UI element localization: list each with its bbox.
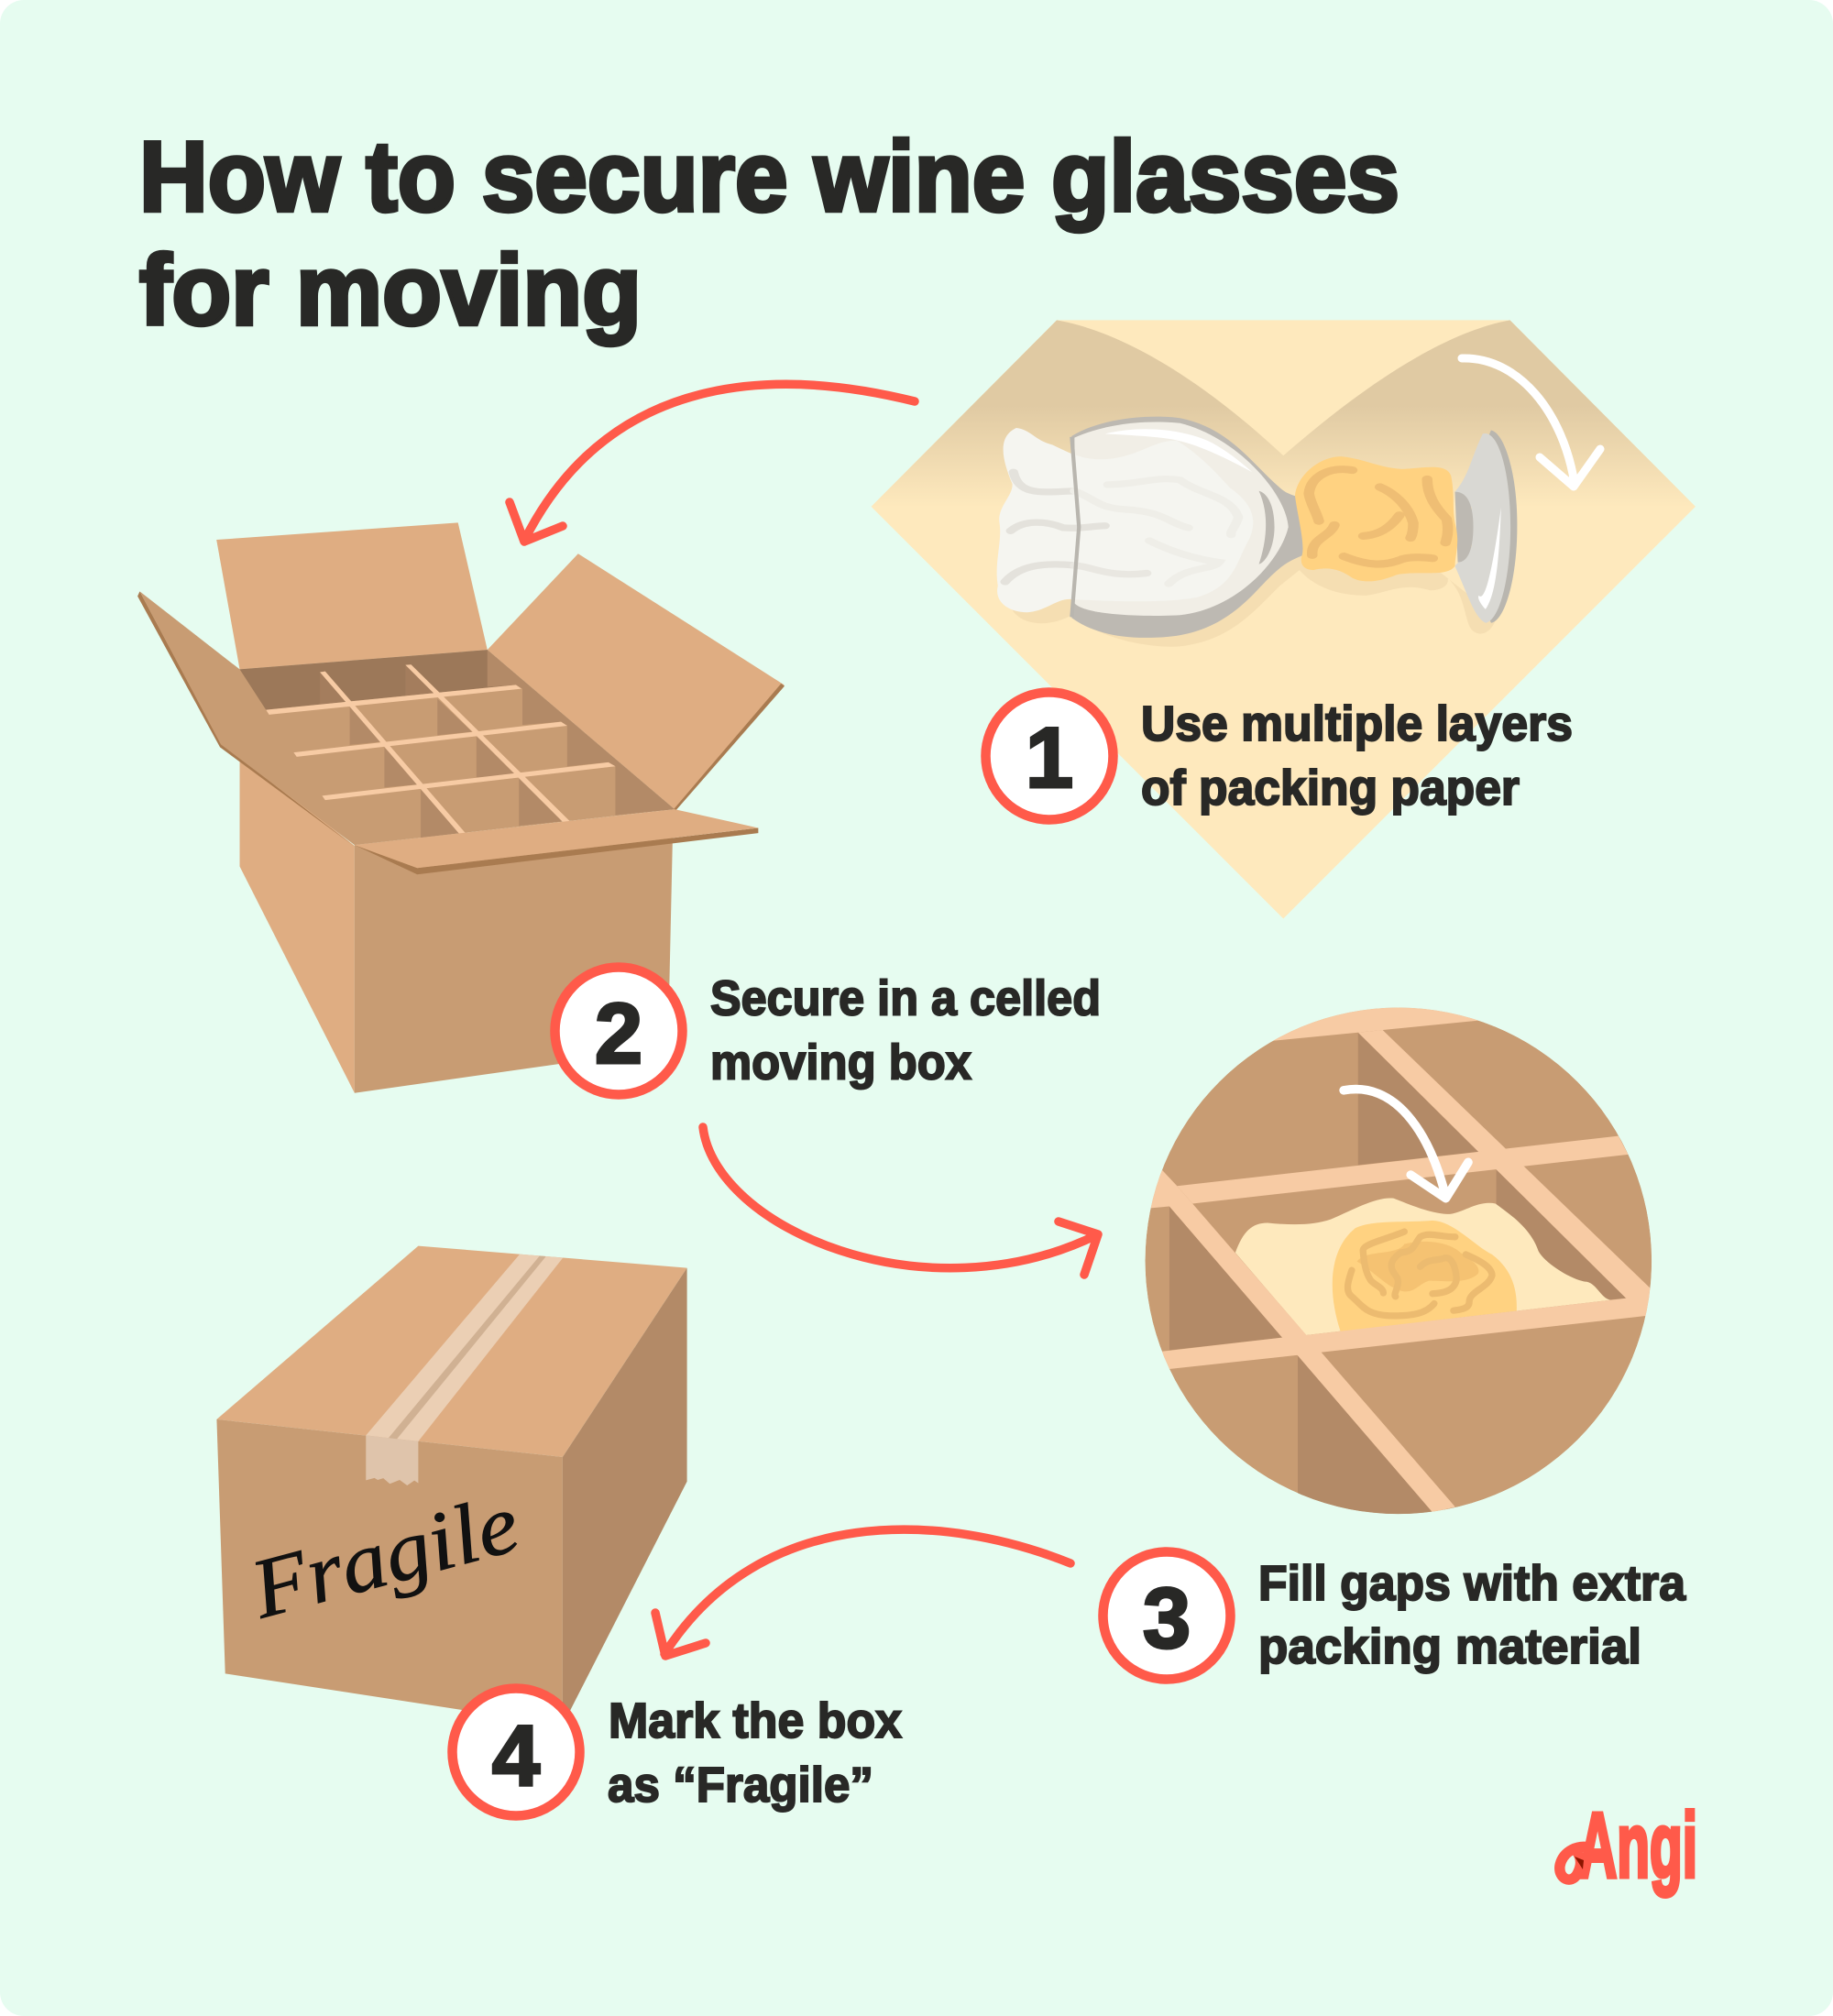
glass bowl and stem: [1071, 417, 1305, 638]
title: for moving: [139, 235, 642, 346]
back wall: [240, 650, 516, 710]
cell base: [1146, 1008, 1652, 1514]
step 3 label: packing material: [1258, 1619, 1641, 1674]
glass highlight: [1105, 429, 1252, 472]
handwritten Fragile: Fragile: [241, 1475, 528, 1637]
glass foot: [1475, 431, 1517, 623]
number badge 4: [453, 1688, 579, 1816]
orange paper shade: [1357, 1242, 1478, 1291]
left flap and interior: [139, 591, 675, 845]
panel: step 3 close-up of filled cell: [1141, 990, 1653, 1516]
right flap edge: [674, 684, 785, 810]
packing paper sheet: [872, 320, 1696, 918]
glass inner curve: [1259, 491, 1275, 564]
tape on top: [366, 1255, 563, 1441]
step 2 label: [555, 968, 1101, 1094]
step 1 label: Use multiple layers: [1141, 696, 1573, 751]
step 3 label: Fill gaps with extra: [1258, 1556, 1686, 1611]
Angi logo: Angi: [1578, 1794, 1697, 1897]
placement arrow: [1344, 1090, 1468, 1199]
foot highlight: [1478, 508, 1501, 609]
paper fold shading: [872, 320, 1696, 507]
step 3 label: [1103, 1552, 1686, 1679]
step 2 label: moving box: [710, 1035, 971, 1090]
right flap: [488, 553, 785, 809]
stem join: [1455, 492, 1474, 563]
step 4 label: 4: [492, 1707, 540, 1803]
title: [139, 121, 1399, 346]
step 2 label: Secure in a celled: [710, 971, 1101, 1026]
step 4 label: as “Fragile”: [608, 1758, 873, 1813]
front flap: [355, 809, 758, 868]
panel: step 2 open celled moving box: [137, 522, 785, 1093]
arrow: step 1 to step 2: [510, 384, 915, 542]
panel: step 1 wrapped wine glass on packing paper: [872, 320, 1696, 918]
cell dividers: [266, 664, 615, 834]
front flap edge: [355, 827, 758, 874]
number badge 1: [986, 693, 1113, 819]
step 1 label: of packing paper: [1141, 761, 1520, 816]
panel: step 4 closed box marked fragile: [216, 1246, 687, 1726]
glass shadow: [1011, 546, 1497, 647]
step 1 label: [986, 693, 1573, 819]
orange paper wrinkles: [1348, 1232, 1492, 1316]
step 4 label: Mark the box: [609, 1693, 902, 1748]
white tissue paper inside glass: [997, 428, 1253, 612]
back flap: [216, 522, 488, 669]
tape seam: [389, 1255, 546, 1440]
light dividers: [1141, 990, 1653, 1512]
orange crumpled paper: [1333, 1221, 1517, 1331]
step 2 label: 2: [595, 985, 642, 1081]
box front: [216, 1419, 563, 1726]
box top: [216, 1246, 687, 1457]
box side: [563, 1268, 687, 1726]
Angi logo: [1560, 1794, 1697, 1897]
tape on front: [366, 1435, 418, 1485]
left face: [240, 754, 355, 1093]
tissue wrinkles: [1005, 472, 1238, 584]
step 1 label: 1: [1026, 709, 1073, 805]
step 3 label: 3: [1143, 1570, 1191, 1666]
glass foot disc: [1455, 433, 1510, 623]
right wall: [488, 650, 675, 816]
fold arrow: [1462, 358, 1600, 487]
cell side faces: [320, 665, 564, 838]
title: How to secure wine glasses: [139, 121, 1399, 233]
left flap edge: [137, 591, 355, 847]
orange paper wrinkles: [1309, 469, 1448, 564]
arrow: step 3 to step 4: [655, 1529, 1070, 1656]
orange paper around stem: [1295, 456, 1457, 581]
step 4 label: [453, 1688, 902, 1816]
front face: [355, 810, 674, 1093]
arrow: step 2 to step 3: [703, 1127, 1098, 1275]
packing paper filler: [1235, 1199, 1626, 1335]
glass bowl inner: [1074, 422, 1289, 616]
number badge 2: [555, 968, 682, 1094]
number badge 3: [1103, 1552, 1230, 1679]
glass rim: [1071, 437, 1079, 617]
cell shadows: [1169, 1033, 1626, 1516]
